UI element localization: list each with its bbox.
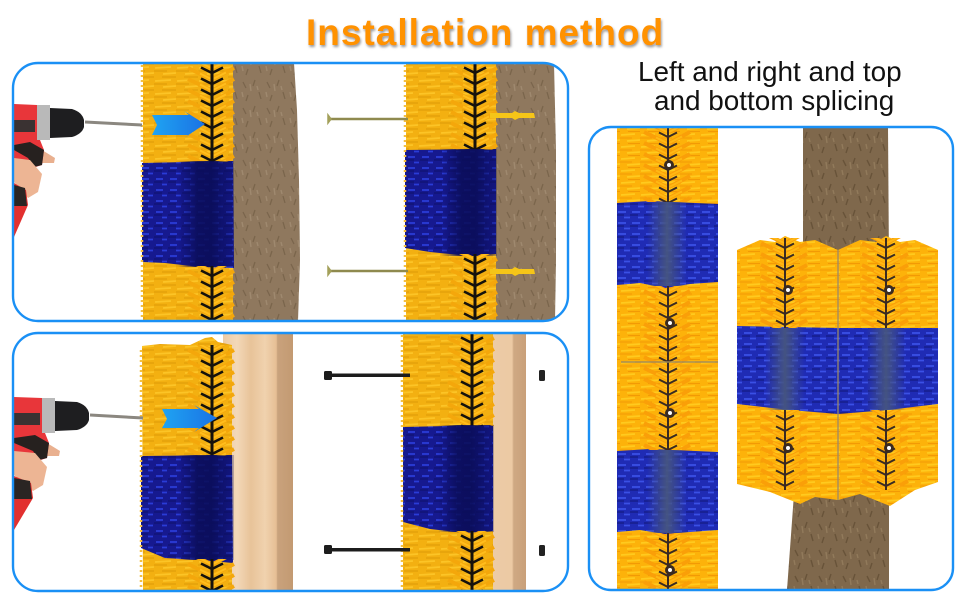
icon: drill <box>14 397 143 530</box>
brush left <box>141 337 236 591</box>
panel: left right top bottom splicing <box>589 127 953 590</box>
arrow: drill direction <box>162 405 217 432</box>
subtitle: left and right and top and bottom splicing <box>638 56 902 116</box>
title: Installation method <box>306 12 664 53</box>
icon: wall anchors <box>490 111 535 276</box>
tree trunk left <box>230 63 300 321</box>
subtitle: left and right and top and bottom splicing: and bottom splicing <box>654 85 894 116</box>
wood post right <box>491 333 526 591</box>
brush left <box>142 63 236 321</box>
horizontal splicing brushes <box>737 236 938 506</box>
vertical splicing brushes <box>617 127 718 590</box>
icon: bolts <box>324 371 410 554</box>
wood post left <box>223 333 293 591</box>
icon: screws <box>328 115 408 275</box>
panel: tree trunk installation <box>13 63 568 321</box>
tree trunk <box>787 127 889 590</box>
subtitle: left and right and top and bottom splicing: Left and right and top <box>638 56 902 87</box>
panel: wood post installation <box>13 333 568 591</box>
brush right <box>405 63 499 321</box>
arrow: drill direction <box>152 111 205 138</box>
tree trunk right <box>492 63 556 321</box>
icon: drill <box>14 104 142 237</box>
brush right <box>402 333 496 591</box>
icon: nuts <box>539 370 545 556</box>
